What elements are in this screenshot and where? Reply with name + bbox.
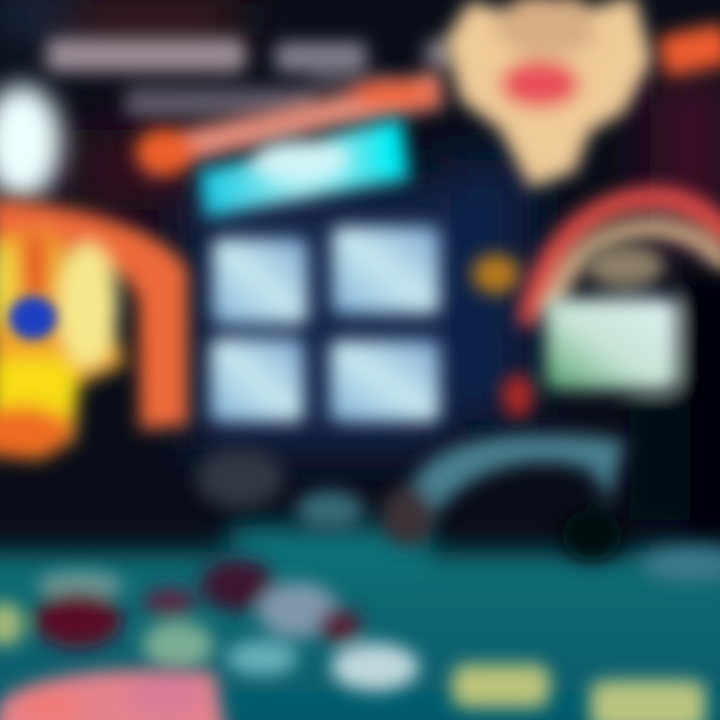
title (illegible blurred lettering) [46,38,455,118]
rainbow arch [502,198,720,530]
white globe at left [0,84,62,200]
central cyan banner [198,118,410,218]
dark game controller / slot console [196,434,625,561]
small gold light [472,254,520,294]
jester face icon [445,0,652,188]
felt table [0,525,720,720]
orange ribbon [135,22,720,178]
central 2×2 screen grid [210,226,440,422]
poker chips and cards on table [0,547,720,720]
left colourful machine [0,200,188,460]
